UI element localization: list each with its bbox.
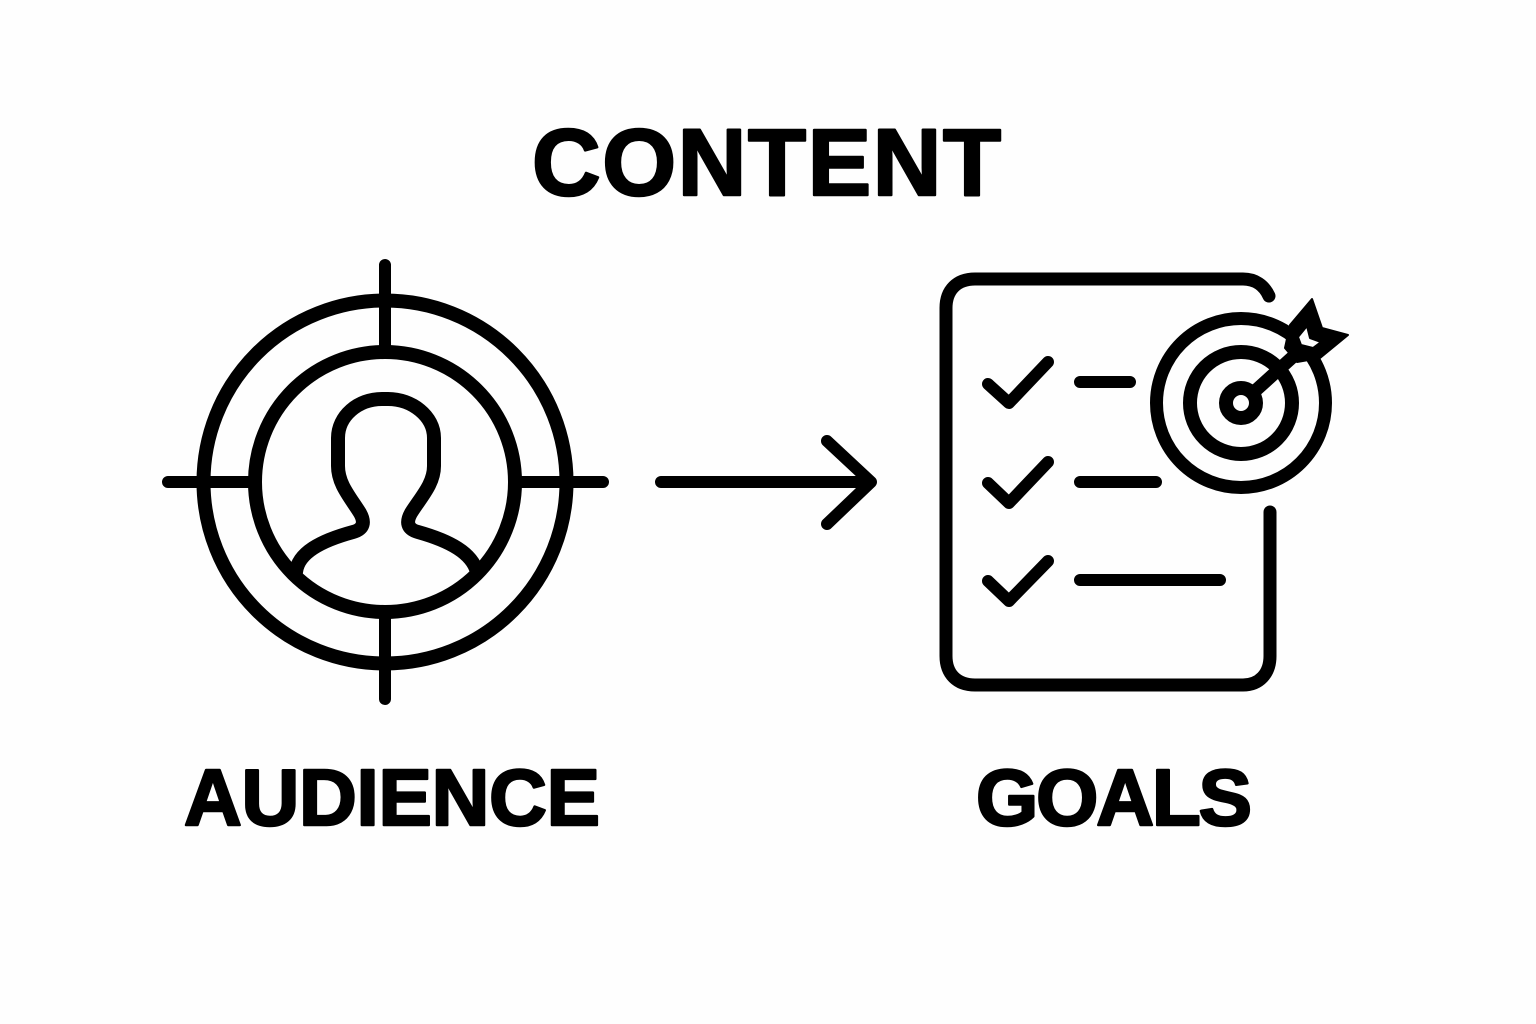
title: CONTENT	[532, 110, 1001, 216]
checklist page	[946, 279, 1270, 685]
icon: goals checklist with target	[946, 279, 1348, 685]
label: audience: AUDIENCE	[184, 753, 600, 842]
checklist items	[988, 362, 1220, 601]
arrow: audience to goals	[661, 441, 871, 524]
icon: audience target with person	[168, 265, 603, 699]
target with dart	[1156, 299, 1348, 488]
label: goals: GOALS	[976, 753, 1252, 842]
